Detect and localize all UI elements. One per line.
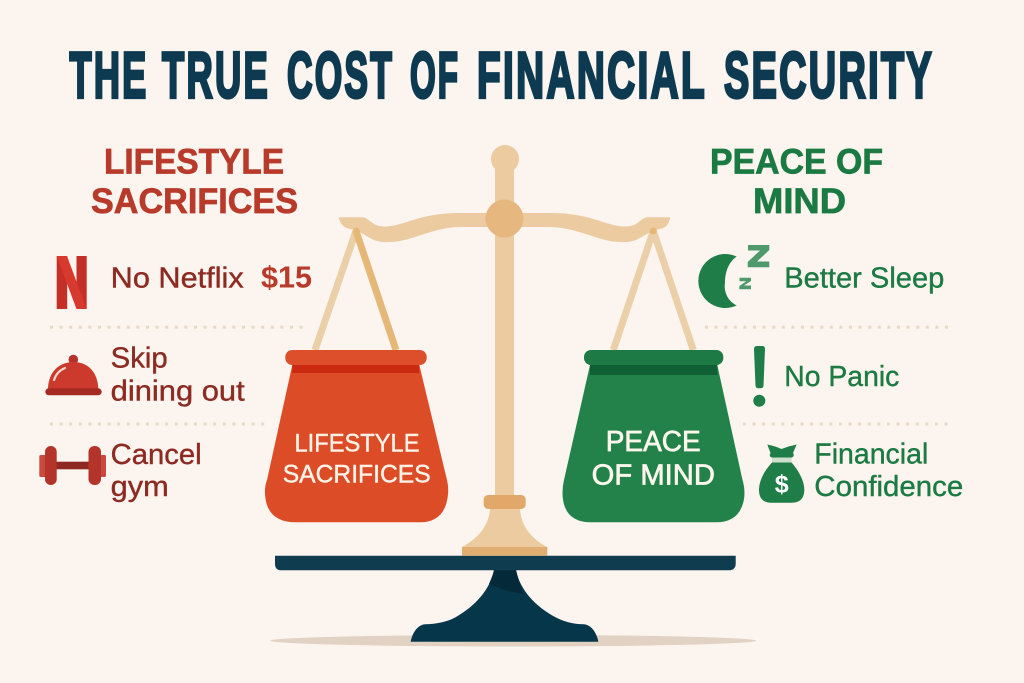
scale pedestal flare <box>462 509 547 547</box>
item: cancel gym: Cancel <box>111 439 202 471</box>
heading: peace of mind: PEACE OF <box>710 142 883 182</box>
title: COST <box>287 39 394 112</box>
icon: dining cloche <box>45 355 102 395</box>
item: financial confidence <box>814 438 963 503</box>
right bag: peace of mind <box>563 350 744 522</box>
panel: lifestyle sacrifices list <box>39 142 312 503</box>
heading: peace of mind <box>710 142 883 221</box>
scale hub <box>486 200 524 238</box>
heading: peace of mind: MIND <box>753 182 846 221</box>
scale table bar <box>275 556 736 570</box>
item: financial confidence: Confidence <box>814 471 963 503</box>
item: better sleep: Better Sleep <box>784 262 944 294</box>
right bag strings <box>613 228 693 350</box>
scale pedestal block <box>462 547 547 556</box>
icon: moon and z letters <box>698 245 769 308</box>
title: THE <box>70 39 148 112</box>
item: no netflix: No Netflix <box>111 262 244 294</box>
title <box>70 39 934 112</box>
left bag: lifestyle sacrifices <box>265 350 448 522</box>
item: skip dining out: dining out <box>111 376 245 408</box>
icon: dumbbell <box>39 446 106 485</box>
heading: lifestyle sacrifices: LIFESTYLE <box>104 142 284 182</box>
scale foot shadow <box>489 570 523 594</box>
panel: peace of mind list <box>698 142 963 503</box>
balance scale <box>265 145 744 642</box>
heading: lifestyle sacrifices: SACRIFICES <box>91 182 298 221</box>
scale top ball <box>491 145 519 173</box>
icon: netflix N <box>57 256 87 309</box>
icon: exclamation mark <box>753 346 765 407</box>
right bag: peace of mind: OF MIND <box>592 459 715 491</box>
left bag: lifestyle sacrifices: SACRIFICES <box>283 461 431 489</box>
item: cancel gym <box>111 439 202 503</box>
item: financial confidence: Financial <box>814 438 928 470</box>
amount: $15: $15 <box>261 259 312 294</box>
title: TRUE <box>162 39 270 112</box>
scale base foot <box>411 570 598 642</box>
right bag: peace of mind: PEACE <box>606 426 701 458</box>
item: skip dining out <box>111 342 245 408</box>
title: OF <box>410 39 460 112</box>
item: cancel gym: gym <box>111 471 169 503</box>
ground shadow <box>270 635 756 646</box>
scale beam <box>339 213 670 242</box>
title: FINANCIAL <box>477 39 707 112</box>
icon: money bag: $ <box>775 470 789 498</box>
heading: lifestyle sacrifices <box>91 142 298 221</box>
left bag strings <box>315 228 396 350</box>
scale collar <box>484 495 526 509</box>
scale pole <box>495 165 514 496</box>
item: no panic: No Panic <box>784 361 899 393</box>
icon: money bag <box>759 444 804 503</box>
left bag: lifestyle sacrifices: LIFESTYLE <box>294 430 420 458</box>
item: skip dining out: Skip <box>111 342 168 374</box>
